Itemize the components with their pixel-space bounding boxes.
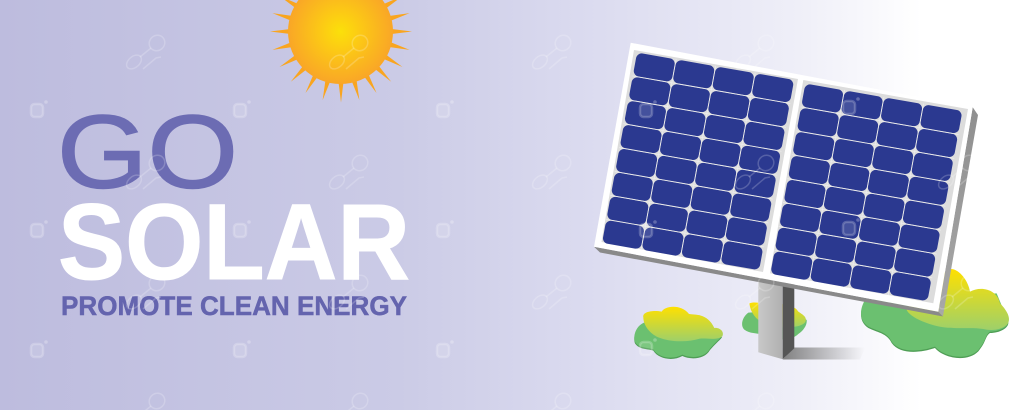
- heading: GO: GO: [57, 94, 238, 210]
- panel: white frame: [594, 43, 973, 312]
- bush: left: [634, 307, 723, 359]
- post shadow: [783, 348, 865, 360]
- post: front face: [758, 270, 783, 359]
- heading: SOLAR: SOLAR: [58, 181, 410, 302]
- tagline: promote clean energy: PROMOTE CLEAN ENERGY: [61, 291, 407, 321]
- post: side face: [783, 270, 794, 359]
- panel: left module: [602, 50, 798, 272]
- bush: right: [861, 269, 1009, 358]
- panel: right module: [770, 80, 968, 303]
- panel: bottom edge shade: [594, 247, 943, 316]
- icon: sun: [270, 0, 412, 102]
- panel: right edge shade: [938, 107, 978, 316]
- illustration: bushes, post and solar panel: [594, 43, 1009, 359]
- bush: middle: [742, 303, 807, 340]
